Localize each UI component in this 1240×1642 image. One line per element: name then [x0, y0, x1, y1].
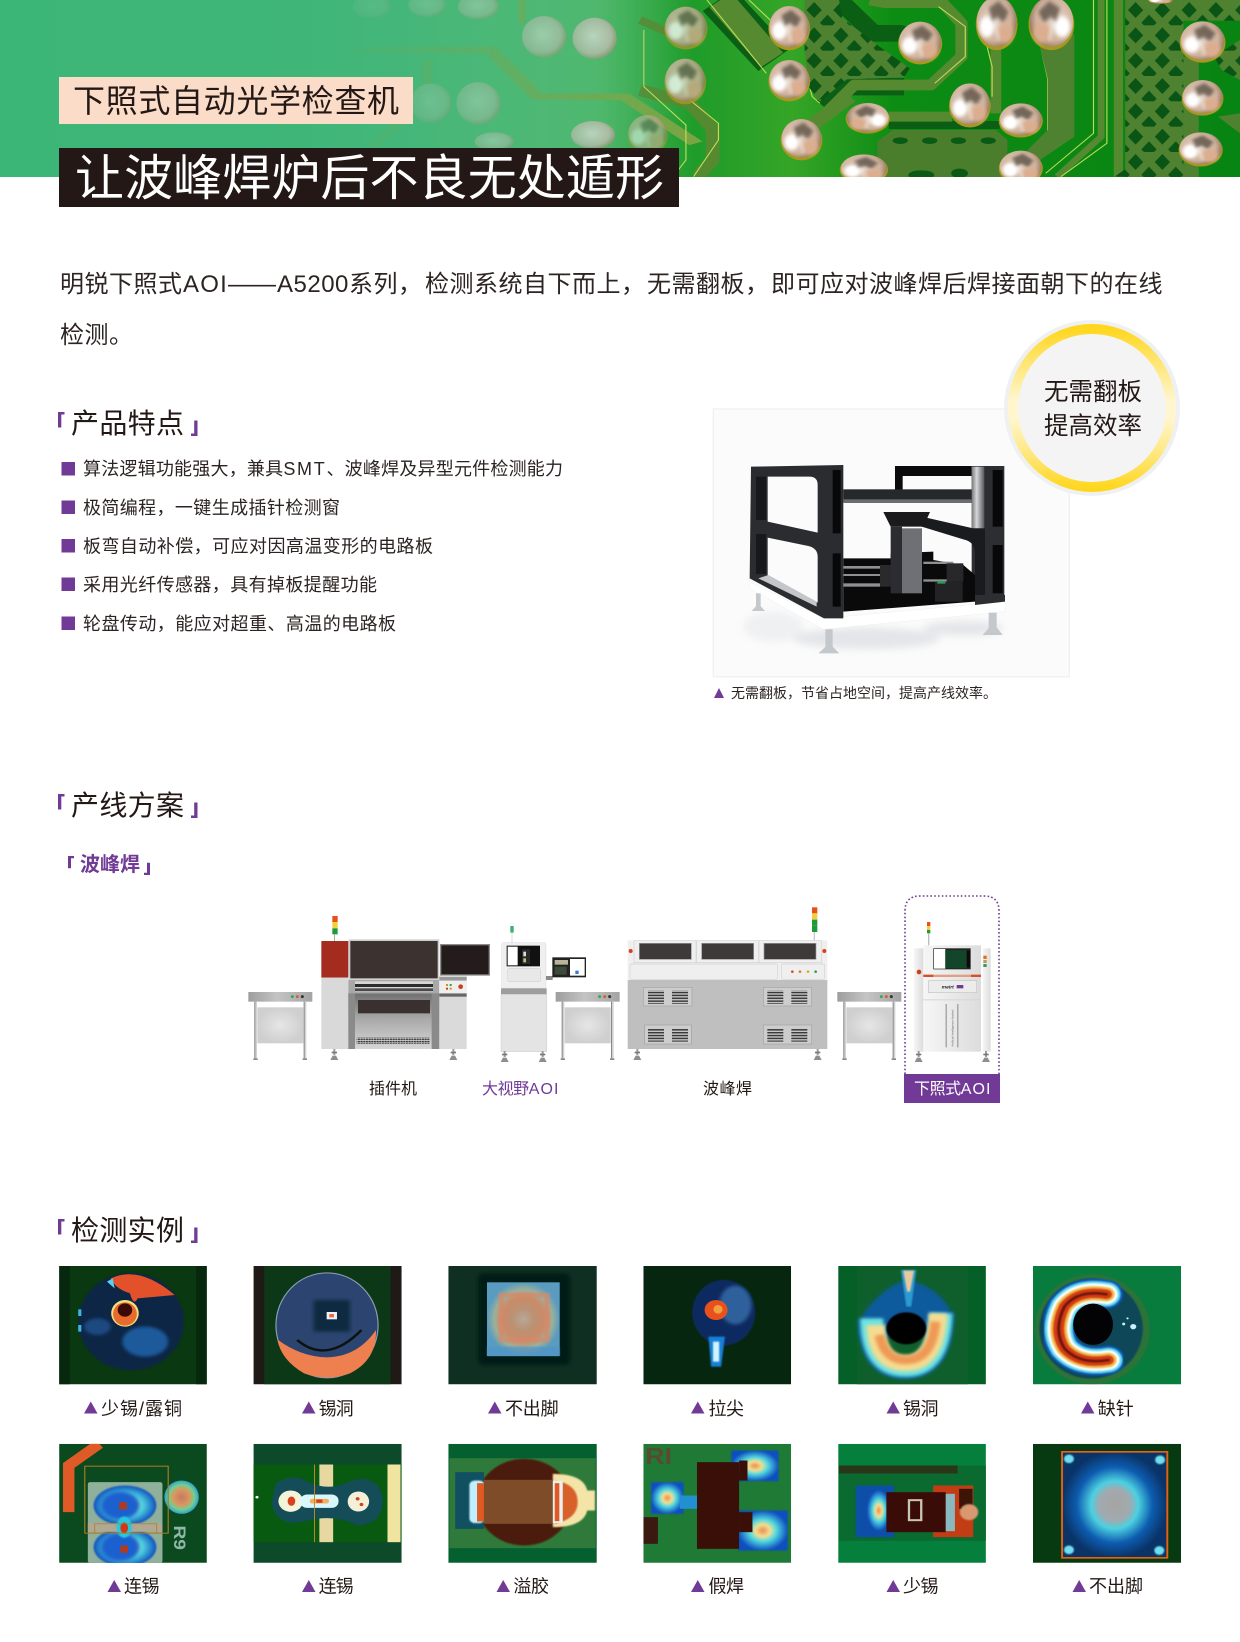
- callout badge: 提高效率: [1044, 412, 1142, 440]
- caption: 连锡: [319, 1576, 354, 1596]
- caption: [108, 1576, 160, 1596]
- example: missing pin: [1033, 1266, 1181, 1419]
- highlighted machine: bottom-view AOI: Artificial Intelligence Applied: [950, 1009, 954, 1047]
- foreground traces and solder joints: [628, 0, 1240, 185]
- callout badge: [1004, 320, 1180, 496]
- machine: wave solder oven: [628, 907, 827, 1060]
- machine labels: 波峰焊: [703, 1080, 752, 1098]
- example: solder void 1: [254, 1266, 402, 1419]
- caption: [496, 1576, 549, 1596]
- caption: [1081, 1399, 1134, 1419]
- intro paragraph: 检测系统自下而上，: [425, 271, 646, 298]
- sub heading: wave soldering: 波峰焊: [80, 853, 140, 876]
- photo caption: 无需翻板，节省占地空间，提高产线效率。: [731, 685, 997, 701]
- header banner: circuit board photo: [0, 0, 1240, 185]
- levelling feet: [752, 593, 1003, 653]
- intro paragraph: 系列，: [349, 271, 422, 298]
- bullet: fibre sensor: 采用光纤传感器，具有掉板提醒功能: [83, 575, 377, 595]
- floor and rails: [843, 552, 975, 612]
- caption: [886, 1399, 938, 1419]
- bullet: programming: 极简编程，一键生成插针检测窗: [83, 498, 340, 518]
- left frame: [750, 465, 843, 618]
- sub heading: wave soldering: [68, 853, 150, 876]
- caption: 少锡: [903, 1576, 938, 1596]
- bullet: algorithm: 算法逻辑功能强大，兼具SMT、波峰焊及异型元件检测能力: [83, 459, 563, 479]
- example: solder spike: [643, 1266, 791, 1419]
- example: insufficient solder / exposed copper: [59, 1266, 207, 1419]
- caption: 连锡: [124, 1576, 160, 1596]
- example: solder bridge 2: [254, 1444, 402, 1596]
- caption: 锡洞: [319, 1399, 354, 1419]
- intro paragraph: [60, 271, 1163, 349]
- example: false solder: RI: [645, 1443, 672, 1469]
- heading: product features: 产品特点: [71, 408, 184, 439]
- highlighted machine: bottom-view AOI: [914, 922, 991, 1062]
- rear right frame: [895, 466, 972, 492]
- caption: [691, 1399, 744, 1419]
- highlighted machine: bottom-view AOI: meirt: [942, 984, 954, 990]
- caption: [886, 1576, 938, 1596]
- linear guide: [758, 575, 817, 607]
- example: solder bridge 1: [59, 1444, 207, 1596]
- faded left traces and joints: [353, 0, 696, 151]
- crossbar: [843, 489, 972, 503]
- caption: [302, 1399, 354, 1419]
- heading: inspection examples: 检测实例: [71, 1215, 184, 1246]
- caption: 不出脚: [1089, 1576, 1143, 1596]
- production line diagram: [248, 896, 1000, 1103]
- example: no lead 2: [1033, 1444, 1181, 1596]
- intro paragraph: ——: [228, 271, 276, 298]
- callout badge: 无需翻板: [1044, 378, 1142, 406]
- intro paragraph: AOI: [183, 271, 228, 298]
- caption: 溢胶: [513, 1576, 549, 1596]
- caption: 拉尖: [708, 1399, 744, 1419]
- machine labels: 插件机: [369, 1080, 417, 1098]
- example: no lead 1: [448, 1266, 597, 1419]
- product photo: inspection machine frame: [713, 409, 1069, 677]
- intro paragraph: 即可应对波峰焊后焊接面朝下的在线: [771, 271, 1163, 298]
- intro paragraph: 明锐下照式: [60, 271, 182, 298]
- camera column: [883, 512, 930, 527]
- highlight frame and tag: 下照式AOI: [914, 1080, 992, 1098]
- support arm: [922, 517, 985, 597]
- intro paragraph: A5200: [277, 271, 349, 298]
- intro paragraph: 无需翻板，: [647, 271, 770, 298]
- bullet: wheel drive: 轮盘传动，能应对超重、高温的电路板: [83, 614, 396, 634]
- inspection examples grid: [59, 1266, 1181, 1596]
- caption: [691, 1576, 744, 1596]
- caption: 锡洞: [903, 1399, 938, 1419]
- caption: 假焊: [708, 1576, 744, 1596]
- caption: 不出脚: [505, 1399, 559, 1419]
- caption: [302, 1576, 354, 1596]
- machine labels: [369, 1080, 752, 1098]
- example: insufficient solder: [838, 1444, 986, 1596]
- base plate: [749, 582, 1005, 629]
- bullet: warp compensation: 板弯自动补偿，可应对因高温变形的电路板: [83, 536, 433, 556]
- subtitle tag: 下照式自动光学检查机: [73, 83, 399, 119]
- example: glue overflow: [448, 1444, 597, 1596]
- example: solder bridge 1: R9: [170, 1525, 189, 1550]
- machine labels: 大视野AOI: [482, 1080, 560, 1098]
- machine: wide field AOI: [501, 926, 586, 1062]
- intro paragraph: 检测。: [60, 322, 134, 349]
- heading: production line: 产线方案: [71, 790, 184, 821]
- feature list: [62, 459, 563, 634]
- caption: 缺针: [1098, 1399, 1134, 1419]
- machine: insertion: [321, 916, 490, 1060]
- caption: 少锡/露铜: [101, 1399, 182, 1419]
- example: false solder: [643, 1443, 791, 1596]
- main title: 让波峰焊炉后不良无处遁形: [75, 152, 664, 206]
- vent grilles: [643, 987, 812, 1044]
- highlight frame and tag: [904, 896, 1000, 1103]
- example: solder void 2: [838, 1266, 986, 1419]
- buffer tables: [248, 992, 901, 1060]
